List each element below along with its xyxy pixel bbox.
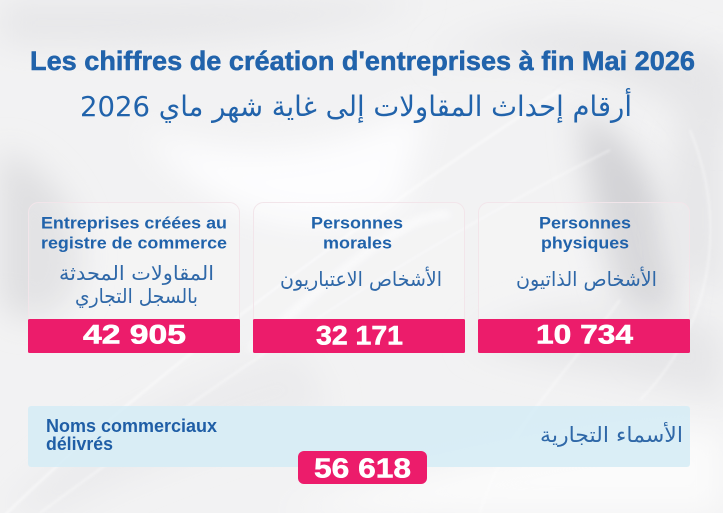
- card background: [28, 202, 240, 332]
- value: 56 618: [314, 452, 411, 484]
- value: 10 734: [536, 320, 633, 350]
- value: 32 171: [316, 320, 403, 350]
- card background: [478, 202, 690, 332]
- label: French: Personnes: [311, 214, 403, 232]
- band background: [28, 406, 690, 467]
- label: French: physiques: [541, 234, 629, 252]
- value: 42 905: [83, 320, 186, 350]
- panel: legal persons: [253, 202, 465, 353]
- value bar: [28, 319, 240, 353]
- label: French: [41, 214, 227, 252]
- label: French: délivrés: [46, 434, 113, 454]
- panel: companies created at the commercial register: [28, 202, 240, 353]
- label: French: [311, 214, 403, 252]
- title: Arabic heading: أرقام إحداث المقاولات إلى غاية شهر ماي 2026: [80, 87, 632, 123]
- value bar: [253, 319, 465, 353]
- title: French heading: Les chiffres de création d'entreprises à fin Mai 2026: [30, 46, 695, 76]
- panel: trade names delivered: [28, 406, 690, 484]
- card background: [254, 202, 464, 332]
- label: Arabic: المقاولات المحدثة: [59, 261, 214, 285]
- value bar: [478, 319, 690, 353]
- label: Arabic: [59, 261, 214, 309]
- label: French: registre de commerce: [41, 234, 227, 252]
- label: Arabic: الأشخاص الاعتباريون: [280, 267, 442, 291]
- label: Arabic: الأشخاص الذاتيون: [516, 267, 657, 291]
- label: Arabic: الأسماء التجارية: [540, 422, 683, 447]
- label: French: Personnes: [539, 214, 631, 232]
- label: Arabic: بالسجل التجاري: [75, 284, 198, 309]
- panel: natural persons: [478, 202, 690, 353]
- value pill: [298, 451, 427, 484]
- label: French: morales: [323, 234, 392, 252]
- label: French: [46, 416, 217, 454]
- label: French: Noms commerciaux: [46, 416, 217, 436]
- label: French: Entreprises créées au: [41, 214, 227, 232]
- label: French: [539, 214, 631, 252]
